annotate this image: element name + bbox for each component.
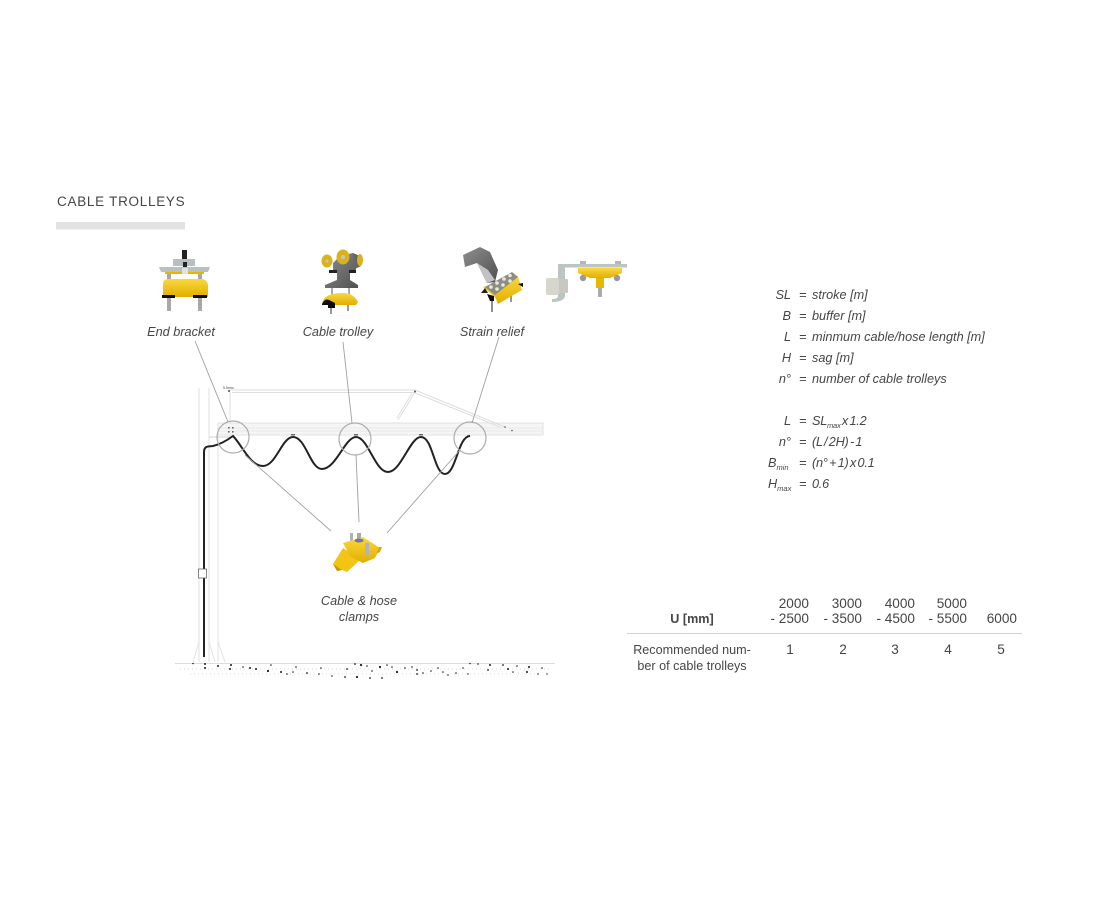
table row: 5 (997, 642, 1005, 657)
label: cable and hose clamps: Cable & hose (321, 594, 397, 608)
table header: - 3500 (823, 611, 862, 626)
table: recommended cable trolleys (627, 596, 1022, 673)
formulas: (L / 2H) - 1 (812, 435, 862, 449)
table row: 4 (944, 642, 952, 657)
label: cable trolley: Cable trolley (303, 325, 374, 339)
horizontal beam (209, 423, 543, 437)
table row: 2 (839, 642, 847, 657)
table header: - 5500 (928, 611, 967, 626)
table row (633, 642, 1005, 673)
cable (204, 436, 470, 657)
formulas: B (768, 456, 776, 470)
table row: 1 (786, 642, 794, 657)
formulas: = (799, 435, 806, 449)
formulas: max (777, 484, 792, 493)
legend: symbol definitions: n° (779, 372, 791, 386)
formulas: SL (812, 414, 827, 428)
table header (670, 596, 1017, 626)
legend: symbol definitions: = (799, 330, 806, 344)
legend: symbol definitions: stroke [m] (812, 288, 868, 302)
table header: 2000 (779, 596, 809, 611)
legend: symbol definitions: H (782, 351, 792, 365)
formulas: n° (779, 435, 791, 449)
ground (175, 663, 555, 679)
table header: 4000 (885, 596, 915, 611)
icon: strain relief (463, 247, 523, 312)
icon: end bracket (159, 250, 210, 311)
table header: 5000 (937, 596, 967, 611)
formulas (768, 414, 874, 493)
legend: symbol definitions: = (799, 288, 806, 302)
formulas: x 1.2 (840, 414, 867, 428)
legend: symbol definitions: sag [m] (812, 351, 854, 365)
legend: symbol definitions: B (783, 309, 792, 323)
formulas: H (768, 477, 777, 491)
legend: symbol definitions: = (799, 309, 806, 323)
upper tie rod (228, 390, 513, 431)
formulas: min (776, 463, 789, 472)
title underline bar (56, 222, 185, 230)
formulas: 0.6 (812, 477, 830, 491)
table row: 3 (891, 642, 899, 657)
formulas: L (784, 414, 791, 428)
label: end bracket: End bracket (147, 325, 215, 339)
legend: symbol definitions: SL (775, 288, 791, 302)
vertical column (193, 388, 225, 662)
legend: symbol definitions: number of cable trolleys (812, 372, 947, 386)
legend: symbol definitions: buffer [m] (812, 309, 866, 323)
table header: - 4500 (876, 611, 915, 626)
leader lines (195, 337, 499, 533)
icon: cable and hose clamp (333, 533, 382, 572)
table row: Recommended num- (633, 643, 751, 657)
icon: bracket with bolt (546, 261, 627, 302)
trolley markers (228, 427, 423, 436)
junction box (198, 569, 206, 578)
legend: symbol definitions: = (799, 372, 806, 386)
table header: 3000 (832, 596, 862, 611)
icon: cable trolley (322, 250, 363, 314)
legend: symbol definitions (775, 288, 985, 386)
table header: - 2500 (770, 611, 809, 626)
table header: 6000 (987, 611, 1017, 626)
legend: symbol definitions: L (784, 330, 791, 344)
formulas: = (799, 477, 806, 491)
crane structure diagram (175, 337, 555, 679)
title: CABLE TROLLEYS (57, 194, 185, 209)
table header: U [mm] (670, 612, 714, 626)
label: strain relief: Strain relief (460, 325, 526, 339)
formulas: max (827, 421, 841, 430)
formulas: (n° + 1) x 0.1 (812, 456, 874, 470)
formulas: = (799, 456, 806, 470)
dimension note: 5.5mm (223, 386, 234, 390)
legend: symbol definitions: minmum cable/hose length [m] (812, 330, 985, 344)
legend: symbol definitions: = (799, 351, 806, 365)
label: cable and hose clamps: clamps (339, 610, 380, 624)
formulas: = (799, 414, 806, 428)
table row: ber of cable trolleys (637, 659, 747, 673)
detail circles (217, 421, 486, 455)
